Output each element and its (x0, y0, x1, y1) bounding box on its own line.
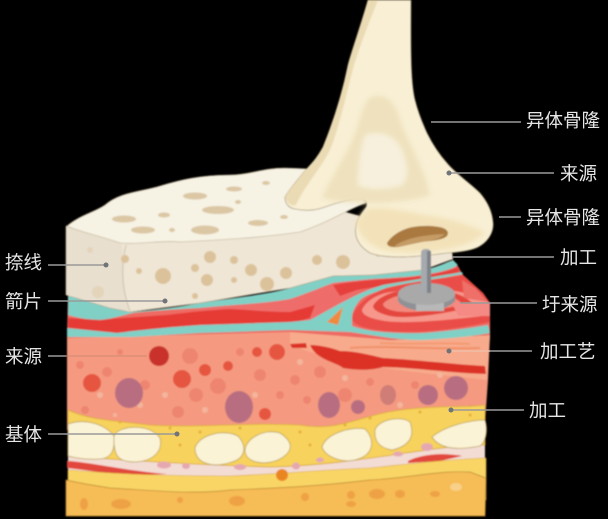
bone graft block top surface (67, 168, 366, 243)
label: right column: 加工艺 (540, 341, 596, 362)
lower teal band (67, 272, 490, 340)
layer: salmon connective tissue (67, 330, 490, 450)
layer: mucosa bands (67, 260, 490, 340)
label: right column: 异体骨隆 (526, 207, 601, 228)
nose-shaped bone graft (285, 0, 493, 257)
swirl (352, 275, 490, 332)
upper teal band (68, 260, 458, 320)
label: right column: 加工 (529, 400, 566, 421)
leader dots (104, 170, 454, 436)
red band (68, 305, 315, 333)
adipose cells (68, 419, 486, 465)
layer: yellow fat (68, 405, 485, 467)
layer: deep orange base (66, 472, 486, 516)
label: left column: 基体 (5, 424, 42, 445)
layer: base fill below fat (68, 430, 485, 485)
label: right column: 圩来源 (542, 294, 598, 315)
red vessel (290, 343, 486, 374)
tissue block illustration (66, 0, 493, 516)
layer: lower yellow (68, 458, 486, 500)
label: left column: 箭片 (5, 291, 42, 312)
nostril (387, 226, 448, 247)
layer: red vessels and pink cells (67, 443, 462, 476)
titanium implant (398, 249, 455, 311)
label: right column: 异体骨隆 (526, 110, 601, 131)
bone graft block front face (66, 200, 453, 312)
label: left column: 来源 (5, 346, 42, 367)
pink wedge (200, 266, 461, 324)
orange spot (276, 469, 288, 481)
label: left column: 捺线 (5, 252, 42, 273)
leader lines (48, 122, 554, 434)
orange wedge (327, 307, 343, 325)
label: right column (526, 110, 601, 421)
label: left column (5, 252, 42, 445)
label: right column: 来源 (560, 163, 597, 184)
label: right column: 加工 (560, 247, 597, 268)
